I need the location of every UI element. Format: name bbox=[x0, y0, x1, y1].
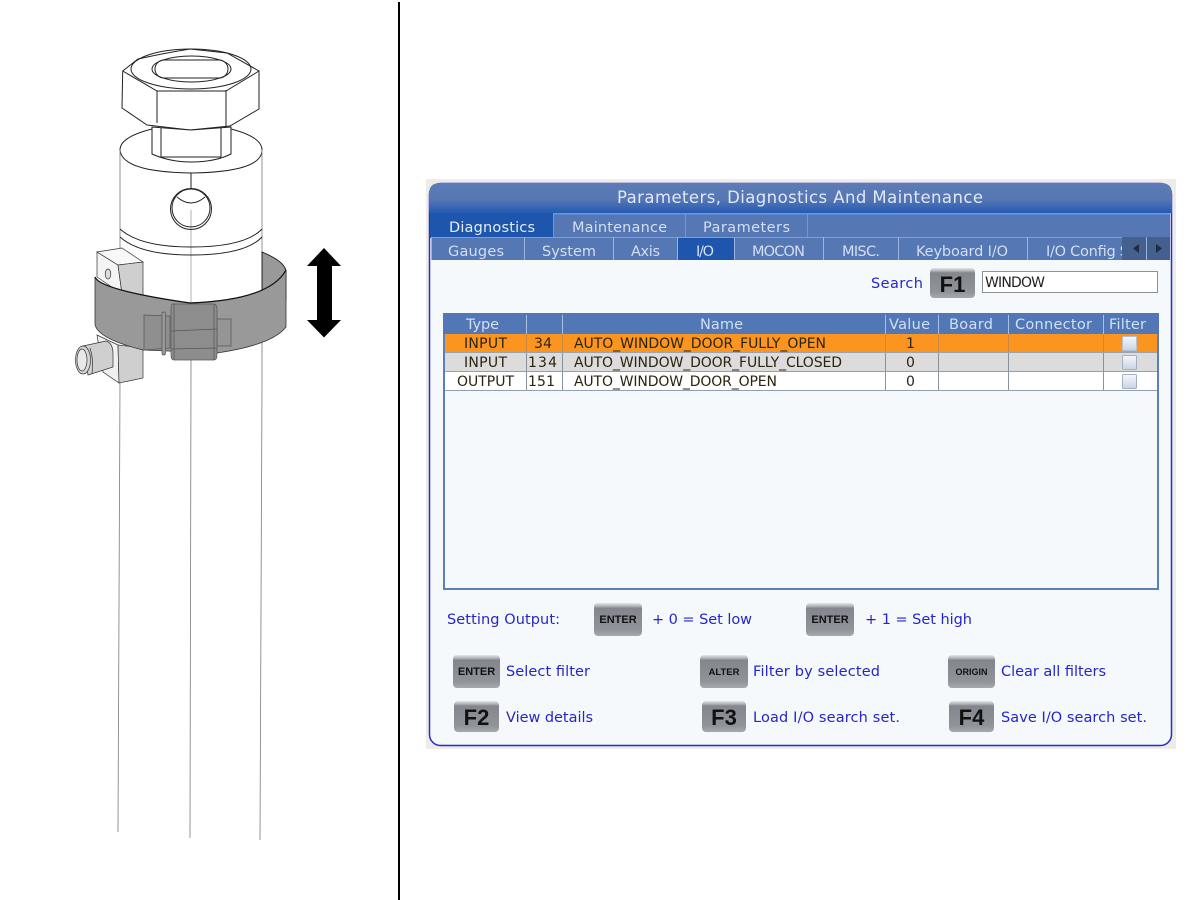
row 134: 134 bbox=[528, 355, 557, 371]
row 151 bbox=[445, 372, 1157, 390]
key: F2 bbox=[454, 701, 499, 732]
search field: Search bbox=[871, 276, 923, 292]
screen panel: parameters diagnostics and maintenance bbox=[429, 183, 1172, 746]
key: ENTER select filter bbox=[453, 655, 500, 688]
sub tabs: Keyboard I/O bbox=[916, 244, 1008, 260]
row 151: OUTPUT bbox=[457, 374, 514, 390]
table header: Value bbox=[889, 317, 930, 333]
function key commands bbox=[454, 701, 1147, 732]
clamp band bbox=[95, 252, 286, 353]
table header: Filter bbox=[1109, 317, 1146, 333]
illustration: window door sensor on cylinder bbox=[76, 49, 341, 840]
function key commands: Save I/O search set. bbox=[1001, 710, 1147, 726]
table header: Connector bbox=[1015, 317, 1092, 333]
row 34 highlighted: 34 bbox=[534, 336, 552, 352]
key: ORIGIN bbox=[948, 655, 995, 688]
row 134: 0 bbox=[906, 355, 915, 371]
panel body bbox=[430, 184, 1172, 746]
key: ENTER set high: ENTER bbox=[811, 614, 849, 626]
sub tabs: MOCON bbox=[752, 244, 805, 260]
row 34 highlighted: 1 bbox=[906, 336, 915, 352]
sub tabs: Axis bbox=[631, 244, 660, 260]
key: F4 bbox=[949, 701, 994, 732]
row 134: INPUT bbox=[464, 355, 507, 371]
key: ALTER: ALTER bbox=[709, 667, 740, 678]
main tabs: Maintenance bbox=[572, 220, 667, 236]
search field: WINDOW bbox=[985, 275, 1045, 291]
key: F2: F2 bbox=[464, 705, 489, 730]
table header: Type bbox=[465, 317, 499, 333]
nut neck bbox=[152, 127, 231, 162]
key: F3: F3 bbox=[711, 705, 737, 730]
key: F1 bbox=[930, 268, 975, 298]
key: ALTER bbox=[700, 655, 748, 688]
key: ENTER select filter: ENTER bbox=[458, 666, 495, 678]
sub tabs bbox=[431, 237, 1170, 260]
collar with ball hole bbox=[120, 129, 262, 255]
row 134 bbox=[445, 353, 1157, 372]
setting output legend: Setting Output: bbox=[447, 612, 560, 628]
main tabs: Parameters bbox=[703, 220, 790, 236]
title bar: Parameters, Diagnostics And Maintenance bbox=[617, 188, 983, 207]
key: F3 bbox=[702, 701, 746, 732]
setting output legend: + 0 = Set low bbox=[652, 612, 752, 628]
row 34 highlighted bbox=[445, 334, 1157, 353]
row 151: AUTO_WINDOW_DOOR_OPEN bbox=[574, 374, 777, 390]
clamp screw bbox=[144, 304, 231, 360]
key: F1: F1 bbox=[940, 272, 965, 297]
sub tabs: MISC. bbox=[842, 244, 880, 260]
key: ENTER set high bbox=[806, 603, 854, 636]
filter commands bbox=[453, 655, 1106, 688]
key: ENTER set low: ENTER bbox=[599, 614, 637, 626]
cylinder shaft lines bbox=[118, 210, 262, 840]
control screen backing bbox=[426, 179, 1176, 749]
setting output legend: + 1 = Set high bbox=[865, 612, 972, 628]
function key commands: View details bbox=[506, 710, 593, 726]
setting output legend bbox=[447, 603, 972, 636]
row 34 highlighted: INPUT bbox=[464, 336, 507, 352]
search field bbox=[871, 268, 1158, 298]
vertical divider bbox=[398, 2, 400, 900]
filter commands: Clear all filters bbox=[1001, 664, 1106, 680]
title bar bbox=[429, 183, 1172, 213]
row 34 highlighted: AUTO_WINDOW_DOOR_FULLY_OPEN bbox=[574, 336, 826, 352]
row 151: 0 bbox=[906, 374, 915, 390]
sub tabs: I/O bbox=[696, 244, 714, 260]
table header: Board bbox=[949, 317, 993, 333]
key: F4: F4 bbox=[959, 705, 985, 730]
table header bbox=[443, 313, 1159, 334]
sub tabs: Gauges bbox=[448, 244, 504, 260]
sensor connector bbox=[76, 341, 113, 375]
key: ENTER set low bbox=[594, 603, 642, 636]
double-headed arrow bbox=[307, 248, 341, 338]
filter commands: Filter by selected bbox=[753, 664, 880, 680]
row 134: AUTO_WINDOW_DOOR_FULLY_CLOSED bbox=[574, 355, 842, 371]
filter commands: Select filter bbox=[506, 664, 590, 680]
key: ORIGIN: ORIGIN bbox=[955, 667, 988, 677]
hex nut bbox=[122, 49, 259, 130]
table header: Name bbox=[700, 317, 743, 333]
sub tabs: I/O Config S bbox=[1046, 244, 1129, 260]
sub tabs: System bbox=[542, 244, 596, 260]
row 151: 151 bbox=[528, 374, 555, 390]
function key commands: Load I/O search set. bbox=[753, 710, 900, 726]
main tabs: Diagnostics bbox=[449, 220, 535, 236]
main tabs bbox=[430, 213, 1170, 238]
sensor bracket bbox=[97, 248, 143, 383]
I/O table bbox=[443, 313, 1159, 589]
